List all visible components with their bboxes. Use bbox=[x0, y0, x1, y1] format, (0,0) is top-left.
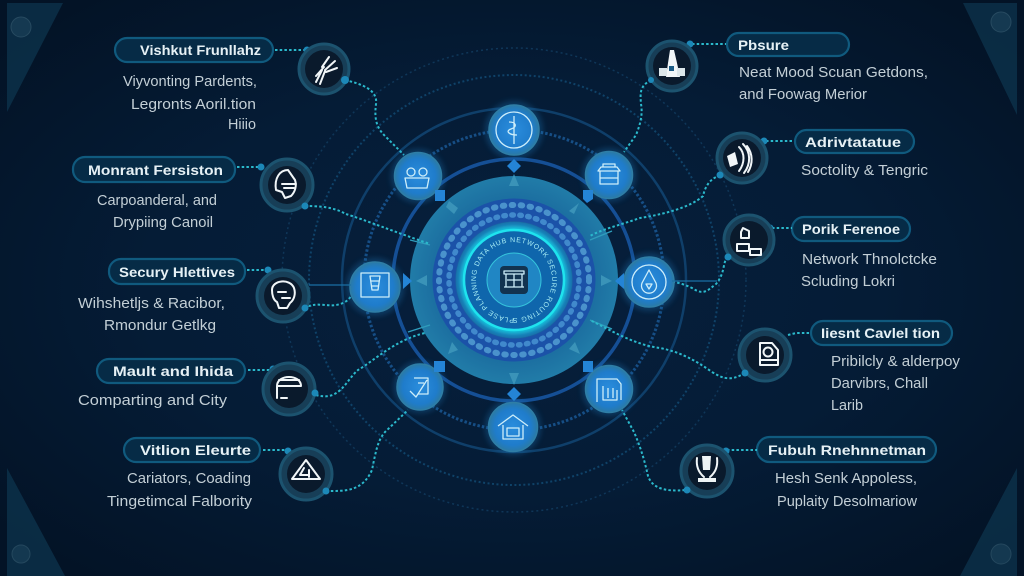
left item 4: Comparting and City bbox=[78, 393, 228, 409]
left item 2: Drypiing Canoil bbox=[113, 215, 213, 231]
icon: cap bbox=[263, 363, 318, 415]
right item 1: and Foowag Merior bbox=[739, 87, 867, 103]
icon: helmet bbox=[261, 159, 313, 211]
left item 5: Cariators, Coading bbox=[127, 471, 251, 487]
icon: disk box bbox=[739, 329, 791, 381]
left item 5: Vitlion Eleurte bbox=[140, 442, 251, 458]
left item 4: Mault and Ihida bbox=[113, 363, 233, 379]
hub gear band bbox=[439, 205, 589, 355]
arrows to hub bbox=[403, 159, 624, 401]
left item 4 bbox=[78, 359, 318, 415]
satellite: right bbox=[620, 253, 678, 311]
right item 1: Neat Mood Scuan Getdons, bbox=[739, 65, 928, 81]
left item 5 bbox=[107, 438, 332, 510]
description: Viyvonting Pardents, bbox=[123, 74, 257, 90]
left item 1 bbox=[115, 38, 349, 133]
left item 2: Carpoanderal, and bbox=[97, 193, 217, 209]
satellite: top bbox=[485, 101, 543, 159]
hub inner disc bbox=[456, 222, 572, 338]
right item 1 bbox=[647, 33, 928, 103]
left item 2 bbox=[73, 157, 313, 231]
satellite: bottom right bbox=[582, 362, 636, 416]
right item 2: Soctolity & Tengric bbox=[801, 163, 928, 179]
hub outer disc bbox=[410, 176, 618, 384]
right item 3: Porik Ferenoe bbox=[802, 221, 900, 237]
satellite: left bbox=[346, 258, 404, 316]
satellite: top left bbox=[391, 149, 445, 203]
left item 3: Rmondur Getlkg bbox=[104, 318, 216, 334]
right item 2: Adrivtatatue bbox=[805, 134, 901, 150]
left item 2: Monrant Fersiston bbox=[88, 162, 223, 178]
right item 3: Scluding Lokri bbox=[801, 274, 895, 290]
orbit rings bbox=[282, 48, 746, 512]
connectors bbox=[304, 80, 745, 491]
right item 4 bbox=[739, 321, 961, 414]
right item 5: Puplaity Desolmariow bbox=[777, 494, 918, 510]
icon: glove bbox=[299, 44, 349, 94]
right item 4: Darvibrs, Chall bbox=[831, 376, 928, 392]
left item 1: Hiiio bbox=[228, 117, 256, 133]
right item 1: Pbsure bbox=[738, 37, 789, 53]
hub center icon bbox=[500, 266, 528, 294]
right item 4: Larib bbox=[831, 398, 863, 414]
satellite: top right bbox=[582, 148, 636, 202]
right item 3 bbox=[672, 215, 937, 290]
hub ring text: PLASE PLANNING DATA HUB NETWORK SECURE ROUTING STATION bbox=[471, 237, 557, 323]
icon: head bbox=[257, 270, 309, 322]
icon: network boxes bbox=[724, 215, 774, 265]
right item 5: Fubuh Rnehnnetman bbox=[768, 442, 926, 458]
left item 5: Tingetimcal Falbority bbox=[107, 494, 253, 510]
right item 4: Pribilcly & alderpoy bbox=[831, 354, 961, 370]
central hub bbox=[410, 176, 618, 384]
icon: trophy bbox=[681, 445, 733, 497]
label pill bbox=[115, 38, 273, 62]
left item 3: Secury Hlettives bbox=[119, 264, 235, 280]
icon: sound waves bbox=[716, 133, 767, 183]
left item 1: Legronts Aoril.tion bbox=[131, 97, 256, 113]
right item 4: Iiesnt Cavlel tion bbox=[821, 325, 940, 341]
right item 5 bbox=[681, 437, 936, 510]
icon: tower bbox=[647, 41, 697, 91]
satellite: bottom left bbox=[394, 361, 446, 413]
spoke lines bbox=[408, 231, 612, 332]
icon: warning triangle bbox=[280, 448, 332, 500]
right item 5: Hesh Senk Appoless, bbox=[775, 471, 917, 487]
satellite: bottom bbox=[485, 399, 541, 455]
right item 3: Network Thnolctcke bbox=[802, 252, 937, 268]
left item 3 bbox=[78, 259, 351, 334]
left item 1: Vishkut Frunllahz bbox=[140, 42, 261, 58]
left item 3: Wihshetljs & Racibor, bbox=[78, 296, 225, 312]
right item 2 bbox=[716, 130, 928, 183]
